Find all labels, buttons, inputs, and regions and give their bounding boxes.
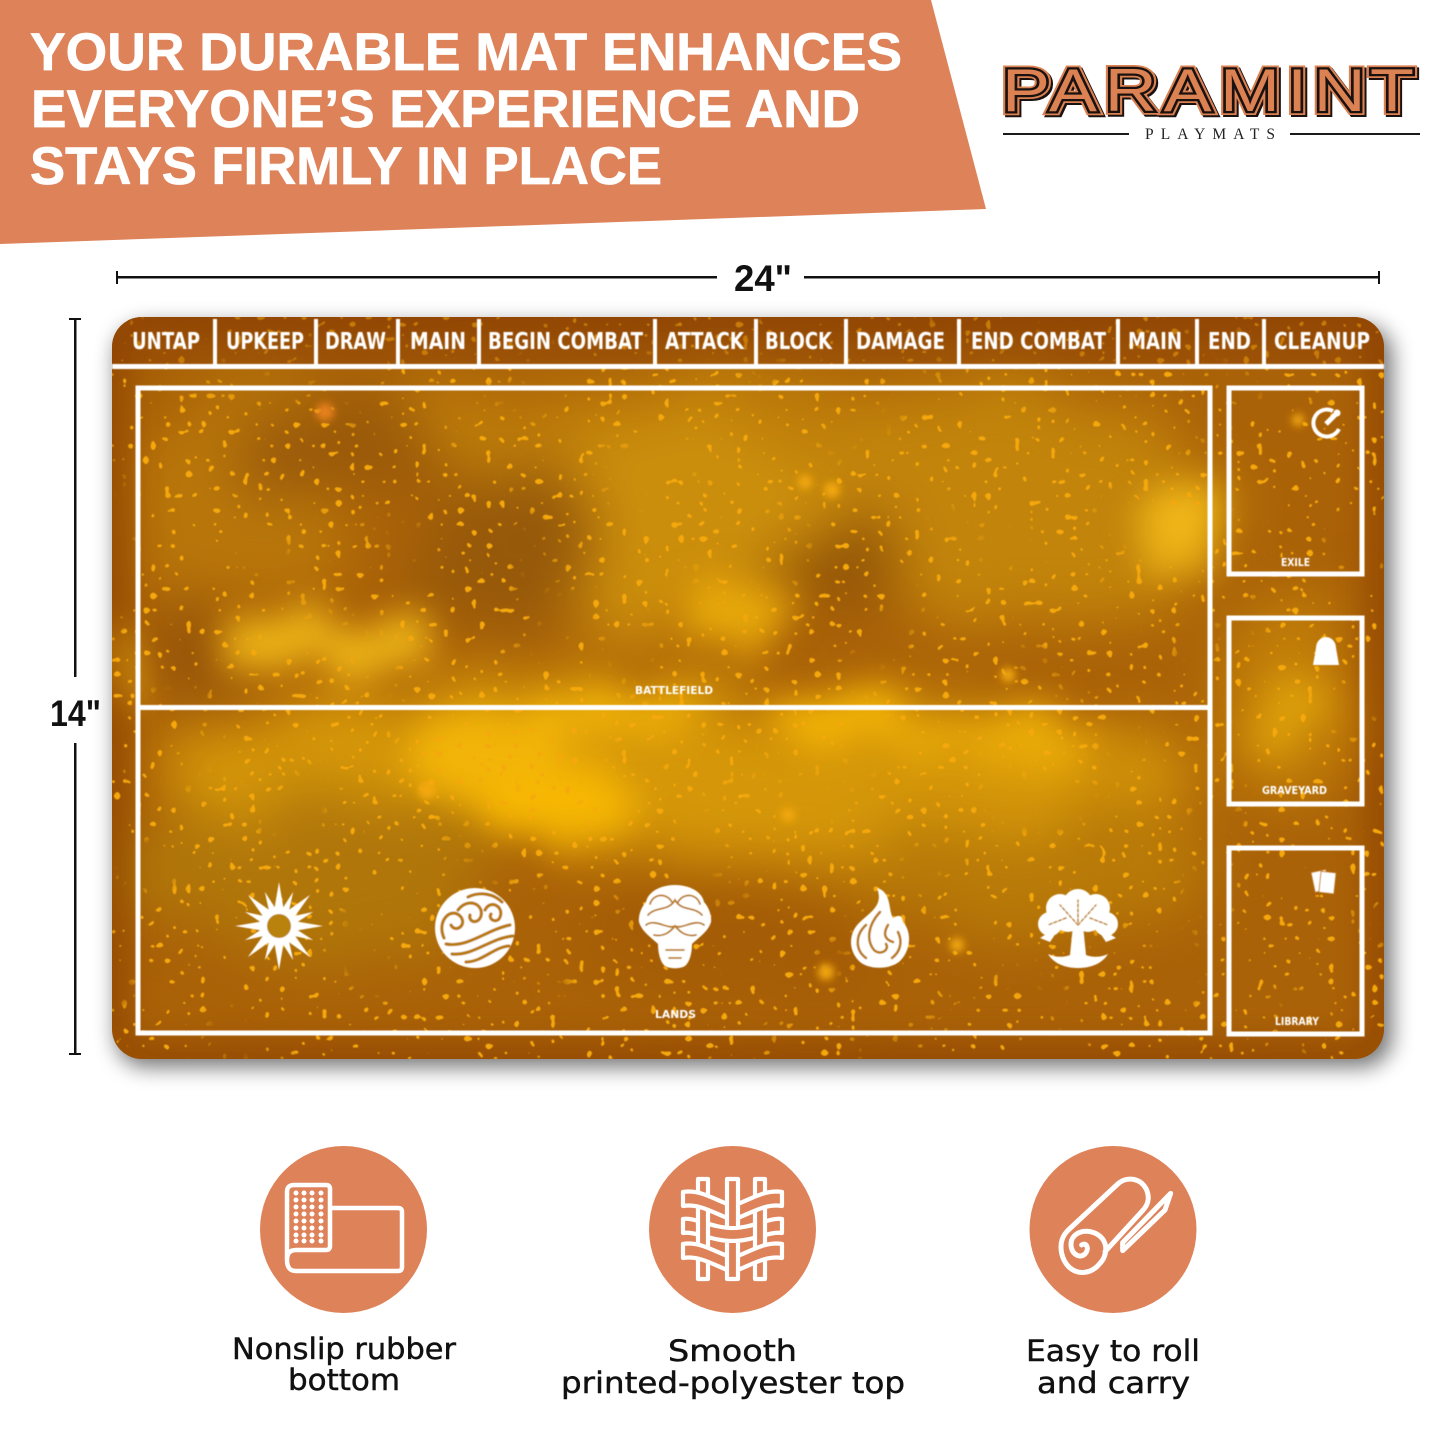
dimension: height 14 inches: 14" xyxy=(50,693,101,734)
dimension: width 24 inches: 24" xyxy=(734,258,792,299)
zone: graveyard: GRAVEYARD xyxy=(1262,784,1327,797)
phase strip: BEGIN COMBAT xyxy=(488,329,643,355)
feature: easy to roll and carry: and carry xyxy=(1037,1366,1190,1400)
zone: library xyxy=(1229,848,1362,1034)
feature: nonslip rubber bottom xyxy=(232,1146,456,1397)
icon: exile xyxy=(1313,410,1340,437)
phase strip: MAIN xyxy=(1128,329,1182,355)
feature: easy to roll and carry: Easy to roll xyxy=(1026,1334,1200,1368)
phase strip: BLOCK xyxy=(765,329,833,355)
star speckles xyxy=(112,317,1384,1059)
header banner xyxy=(0,0,986,244)
icon: tombstone xyxy=(1313,637,1339,665)
icon: rolled mat xyxy=(1030,1146,1196,1313)
icon: earth mask xyxy=(639,885,711,968)
feature: nonslip rubber bottom: bottom xyxy=(288,1363,400,1397)
zone: exile: EXILE xyxy=(1281,556,1310,569)
icon: cards xyxy=(1311,870,1336,894)
edge vignette xyxy=(112,317,1384,1059)
zone: battlefield and lands: BATTLEFIELD xyxy=(635,684,713,697)
phase strip: UNTAP xyxy=(132,329,200,355)
logo: Paramint Playmats: PLAYMATS xyxy=(1145,126,1275,143)
icon: fire xyxy=(851,888,909,968)
zone: battlefield and lands xyxy=(138,388,1210,1033)
headline: STAYS FIRMLY IN PLACE xyxy=(30,137,662,196)
icon: woven fabric xyxy=(649,1146,816,1313)
headline: YOUR DURABLE MAT ENHANCES xyxy=(30,23,902,82)
icon: rubber mat xyxy=(260,1146,427,1313)
phase strip xyxy=(112,319,1384,369)
phase strip: CLEANUP xyxy=(1274,329,1370,355)
phase strip: END xyxy=(1208,329,1251,355)
feature: smooth printed-polyester top xyxy=(561,1146,905,1400)
mat artwork: nebula background xyxy=(99,317,1384,1059)
logo: Paramint Playmats: PARAMINT xyxy=(1004,60,1416,127)
playmat xyxy=(99,317,1384,1059)
mat shadow xyxy=(116,325,1392,1067)
icon: tree xyxy=(1038,889,1118,968)
zone: graveyard xyxy=(1229,618,1362,804)
feature: smooth printed-polyester top: Smooth xyxy=(668,1334,797,1368)
phase strip: DAMAGE xyxy=(856,329,945,355)
headline: EVERYONE’S EXPERIENCE AND xyxy=(31,80,860,139)
logo: Paramint Playmats: PARAMINT xyxy=(1002,58,1414,125)
headline xyxy=(30,23,902,196)
zone: library: LIBRARY xyxy=(1275,1015,1320,1028)
feature: nonslip rubber bottom: Nonslip rubber xyxy=(232,1332,456,1366)
phase strip: DRAW xyxy=(325,329,386,355)
phase strip: UPKEEP xyxy=(226,329,304,355)
zone: battlefield and lands: LANDS xyxy=(655,1008,696,1021)
logo: Paramint Playmats: PARAMINT xyxy=(1002,58,1414,125)
icon: water xyxy=(435,888,515,968)
phase strip: MAIN xyxy=(410,329,466,355)
logo: Paramint Playmats: PARAMINT xyxy=(1002,58,1414,125)
icon: sun xyxy=(235,882,323,970)
zone: exile xyxy=(1229,388,1362,574)
feature: easy to roll and carry xyxy=(1026,1146,1200,1400)
phase strip: END COMBAT xyxy=(971,329,1106,355)
phase strip: ATTACK xyxy=(665,329,745,355)
feature: smooth printed-polyester top: printed-polyester top xyxy=(561,1366,905,1400)
